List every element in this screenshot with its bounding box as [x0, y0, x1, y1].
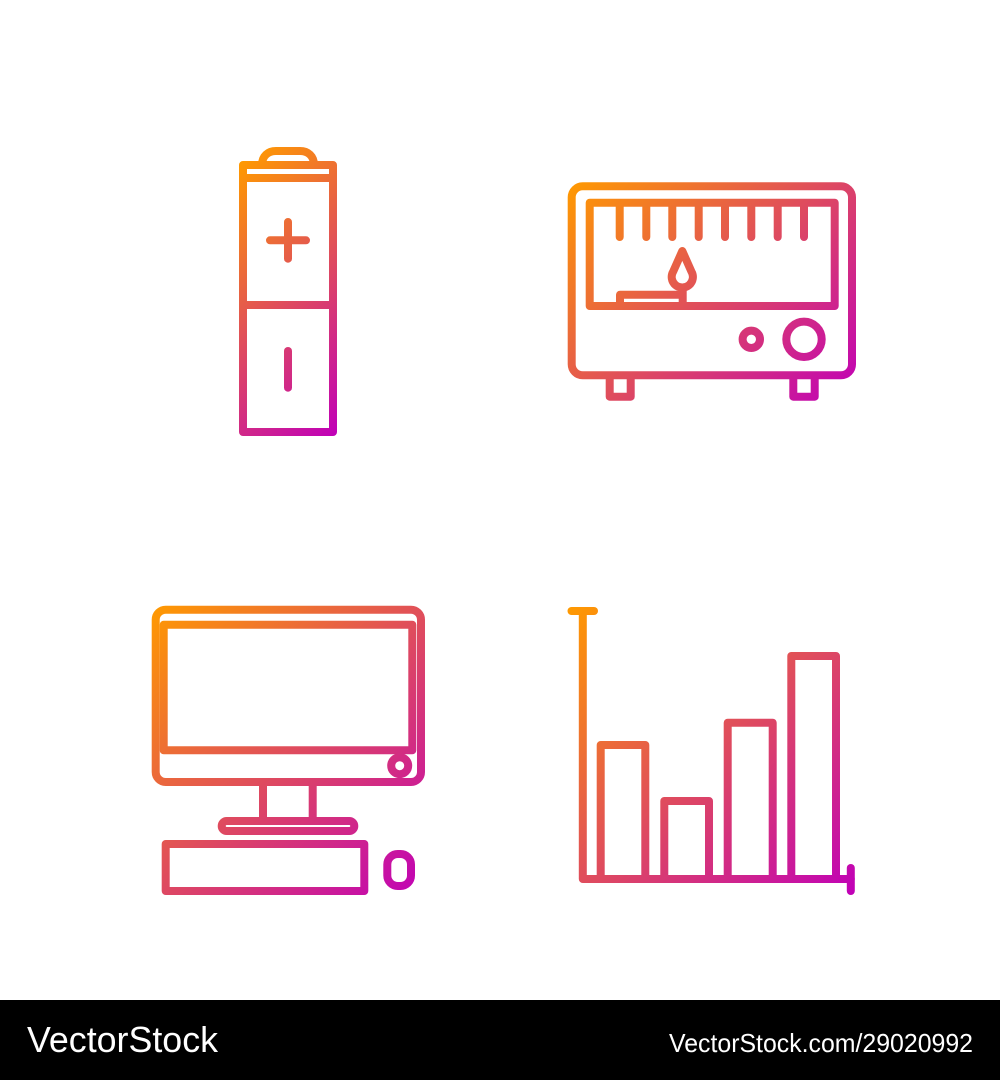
plus sign [270, 222, 306, 259]
keyboard [166, 844, 364, 891]
image id: VectorStock.com/29020992 [669, 1028, 973, 1058]
flame [672, 251, 693, 288]
scale ticks [620, 203, 804, 237]
icon: battery [243, 151, 333, 432]
icon: desktop computer [156, 610, 421, 891]
mouse [387, 854, 411, 886]
brand name: VectorStock [27, 1019, 219, 1060]
icon: analog gauge meter [572, 186, 852, 397]
footer bar [0, 1000, 1000, 1080]
icon: bar chart [572, 611, 851, 891]
